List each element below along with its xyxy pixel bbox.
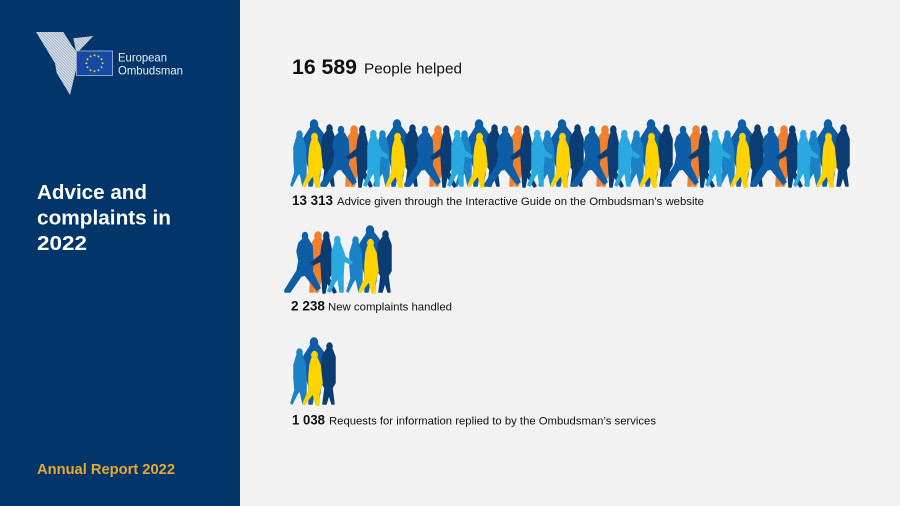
panel: sidebar (0, 0, 240, 506)
stat: new complaints: 2 238 (291, 298, 325, 314)
logo text: Ombudsman: Ombudsman (118, 64, 183, 78)
headline stat: people helped (292, 56, 462, 79)
logo text: European: European (118, 50, 167, 64)
icon: winged Y emblem (36, 32, 93, 95)
stat: advice given: Advice given through the Interactive Guide on the Ombudsman’s website (337, 196, 704, 208)
headline stat: people helped: People helped (364, 62, 462, 78)
headline stat: people helped: 16 589 (292, 56, 357, 79)
pictogram row: 13 313 advice (291, 120, 849, 187)
title: Advice and (37, 182, 147, 204)
pictogram row: 2 238 complaints (285, 226, 391, 293)
stat: requests for information: 1 038 (292, 412, 325, 428)
icon: EU flag (76, 51, 112, 76)
pictogram row: 1 038 requests (291, 338, 335, 405)
title (37, 182, 171, 255)
title: 2022 (37, 233, 87, 255)
stat: advice given (292, 193, 704, 208)
stat: new complaints (291, 298, 452, 314)
footer: Annual Report 2022: Annual Report 2022 (37, 461, 175, 478)
title: complaints in (37, 208, 171, 230)
stat: requests for information: Requests for information replied to by the Ombudsman’s services (329, 416, 657, 428)
stat: advice given: 13 313 (292, 193, 333, 208)
stat: new complaints: New complaints handled (328, 302, 452, 314)
logo: European Ombudsman (36, 32, 183, 95)
stat: requests for information (292, 412, 657, 428)
